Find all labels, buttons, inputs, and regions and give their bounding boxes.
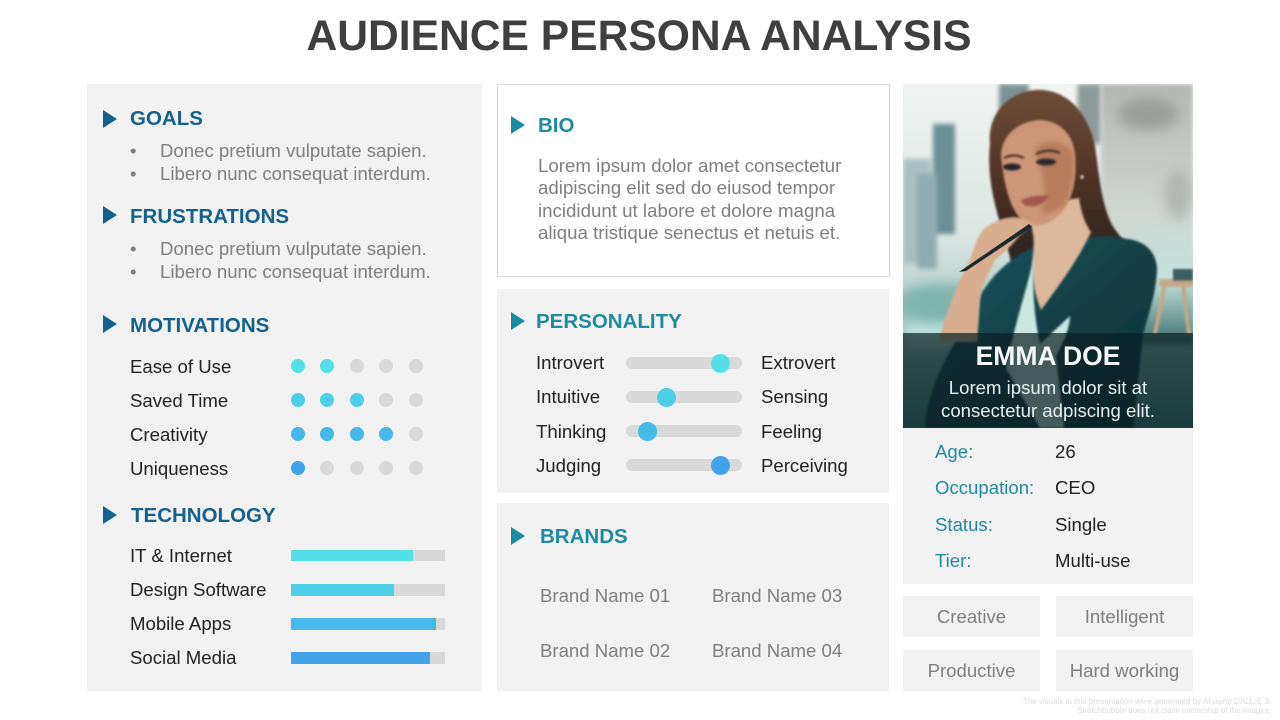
panel: personal details: [903, 428, 1193, 584]
dot rating: motivations: Uniqueness: [130, 458, 228, 479]
tag: hard working: Hard working: [1070, 660, 1179, 681]
text: bio: [538, 155, 842, 243]
heading: goals: GOALS: [130, 107, 203, 130]
icon: frustrations arrow: [103, 206, 117, 224]
panel: personal details: Occupation:: [935, 477, 1034, 498]
text: bio: aliqua tristique senectus et netuis et.: [538, 222, 840, 243]
jacket: [925, 237, 1157, 428]
heading: personality: PERSONALITY: [536, 310, 682, 333]
text: bio: Lorem ipsum dolor amet consectetur: [538, 155, 841, 176]
tag: intelligent: [1056, 596, 1193, 637]
sliders: personality: Perceiving: [761, 455, 848, 476]
bar chart: technology: IT & Internet: [130, 545, 232, 566]
panel: personal details: 26: [1055, 441, 1076, 462]
panel: personal details: Age:: [935, 441, 973, 462]
sliders: personality: Intuitive: [536, 386, 600, 407]
sliders: personality: Extrovert: [761, 352, 835, 373]
pen: [959, 224, 1032, 272]
text: bio: adipiscing elit sed do eiusod tempor: [538, 177, 835, 198]
icon: personality arrow: [511, 312, 525, 330]
portrait: persona photo illustration: [903, 84, 1193, 428]
bar chart: technology: Mobile Apps: [130, 613, 231, 634]
list: goals: Libero nunc consequat interdum.: [160, 163, 431, 184]
list: frustrations: Libero nunc consequat interdum.: [160, 261, 431, 282]
list: frustrations: •: [130, 261, 137, 282]
icon: goals arrow: [103, 110, 117, 128]
icon: bio arrow: [511, 116, 525, 134]
panel: personal details: Status:: [935, 514, 993, 535]
brand names: Brand Name 04: [712, 640, 842, 661]
list: goals: •: [130, 163, 137, 184]
dot rating: motivations: Ease of Use: [130, 356, 231, 377]
tag: productive: Productive: [928, 660, 1015, 681]
tag: hard working: [1056, 650, 1193, 691]
arm and hand: [939, 217, 1033, 342]
icon: technology arrow: [103, 506, 117, 524]
heading: frustrations: FRUSTRATIONS: [130, 205, 289, 228]
neck and chest: [1025, 198, 1091, 310]
brand names: [540, 585, 842, 661]
brand names: Brand Name 02: [540, 640, 670, 661]
sliders: personality: Sensing: [761, 386, 828, 407]
tag: productive: [903, 650, 1040, 691]
hair: [989, 90, 1131, 262]
title: AUDIENCE PERSONA ANALYSIS: [306, 12, 972, 60]
sliders: personality: Judging: [536, 455, 601, 476]
footnote: The visuals in this presentation were generated by AI using DALL-E 3.: [1023, 697, 1271, 706]
dot rating: motivations: Saved Time: [130, 390, 228, 411]
tagline: consectetur adpiscing elit.: [941, 400, 1155, 421]
sliders: personality: Thinking: [536, 421, 606, 442]
brand names: Brand Name 03: [712, 585, 842, 606]
sliders: personality: [536, 352, 848, 476]
bar chart: technology: Design Software: [130, 579, 266, 600]
list: frustrations: Donec pretium vulputate sapien.: [160, 238, 427, 259]
tag: intelligent: Intelligent: [1085, 606, 1164, 627]
bar chart: technology: Social Media: [130, 647, 236, 668]
list: frustrations: [130, 238, 431, 282]
bar chart: technology: [130, 545, 445, 668]
heading: motivations: MOTIVATIONS: [130, 314, 269, 337]
panel: personal details: Single: [1055, 514, 1107, 535]
heading: bio: BIO: [538, 114, 574, 137]
footnote: Sketchbubble does not claim ownership of the images.: [1078, 706, 1271, 715]
panel: personal details: Multi-use: [1055, 550, 1130, 571]
face: [1001, 120, 1076, 225]
footnote: [1023, 697, 1271, 715]
tag: creative: [903, 596, 1040, 637]
icon: motivations arrow: [103, 315, 117, 333]
text: bio: incididunt ut labore et dolore magna: [538, 200, 835, 221]
caption band: name and tagline: [903, 333, 1193, 428]
blouse: [1006, 256, 1070, 428]
list: goals: [130, 140, 431, 184]
eyes and lips: [1003, 151, 1084, 206]
sliders: personality: Feeling: [761, 421, 822, 442]
list: goals: Donec pretium vulputate sapien.: [160, 140, 427, 161]
heading: brands: BRANDS: [540, 525, 628, 548]
icon: brands arrow: [511, 527, 525, 545]
tagline: [941, 377, 1155, 421]
dot rating: motivations: Creativity: [130, 424, 208, 445]
tagline: Lorem ipsum dolor sit at: [949, 377, 1147, 398]
dot rating: motivations: [130, 356, 423, 479]
panel: personality: [497, 289, 889, 493]
list: goals: •: [130, 140, 137, 161]
heading: technology: TECHNOLOGY: [131, 504, 276, 527]
list: frustrations: •: [130, 238, 137, 259]
panel: brands: [497, 503, 889, 691]
tag: creative: Creative: [937, 606, 1006, 627]
brand names: Brand Name 01: [540, 585, 670, 606]
name: EMMA DOE: [976, 341, 1120, 371]
panel: personal details: CEO: [1055, 477, 1095, 498]
panel: goals, frustrations, motivations, technology: [87, 84, 482, 691]
panel: bio: [497, 84, 890, 277]
sliders: personality: Introvert: [536, 352, 604, 373]
panel: personal details: Tier:: [935, 550, 972, 571]
